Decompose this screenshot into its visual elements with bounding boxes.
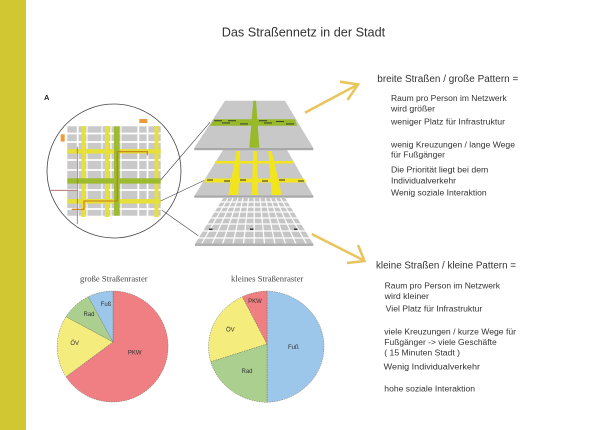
text block: small streets: viele Kreuzungen / kurze Wege für bbox=[384, 327, 516, 336]
pie chart title: large grid: große Straßenraster bbox=[80, 274, 148, 284]
text block: wide streets: weniger Platz für Infrastruktur bbox=[390, 117, 505, 126]
text block: small streets: Fußgänger -> viele Geschäfte bbox=[384, 338, 497, 347]
text block: small streets bbox=[376, 260, 516, 393]
arrow: to small streets bbox=[312, 234, 364, 263]
pie chart: large grid: Fuß bbox=[101, 302, 112, 308]
title: Das Straßennetz in der Stadt bbox=[222, 24, 386, 40]
pie chart: large grid: PKW bbox=[128, 350, 142, 356]
label A: A bbox=[44, 93, 50, 102]
text block: wide streets: Individualverkehr bbox=[391, 176, 456, 185]
text block: wide streets: Die Priorität liegt bei dem bbox=[391, 166, 489, 175]
text block: wide streets: Wenig soziale Interaktion bbox=[391, 189, 487, 198]
pie chart: small grid bbox=[209, 291, 324, 402]
text block: small streets: wird kleiner bbox=[384, 292, 429, 301]
left accent bar bbox=[0, 0, 26, 430]
pie chart: large grid: Rad bbox=[83, 312, 95, 318]
top layer: green streets bbox=[194, 101, 313, 150]
text block: small streets: hohe soziale Interaktion bbox=[384, 384, 475, 393]
text block: small streets: Wenig Individualverkehr bbox=[384, 362, 480, 371]
middle layer: yellow streets bbox=[194, 150, 313, 198]
text block: wide streets: breite Straßen / große Pattern = bbox=[377, 74, 518, 85]
arrow: to wide streets bbox=[305, 82, 358, 113]
text block: small streets: ( 15 Minuten Stadt ) bbox=[384, 349, 460, 358]
text block: wide streets: wird größer bbox=[390, 105, 435, 114]
pie chart: small grid: Rad bbox=[241, 369, 253, 375]
circular street map bbox=[47, 104, 181, 238]
pie chart: small grid: Fuß bbox=[288, 345, 299, 351]
text block: wide streets: Raum pro Person im Netzwerk bbox=[391, 94, 508, 103]
leader lines bbox=[161, 122, 210, 236]
pie chart: small grid: ÖV bbox=[226, 326, 235, 334]
text block: wide streets: wenig Kreuzungen / lange Wege bbox=[390, 141, 516, 150]
pie chart title: small grid: kleines Straßenraster bbox=[231, 274, 303, 284]
text block: small streets: Viel Platz für Infrastruktur bbox=[386, 305, 483, 314]
bottom layer: fine grid bbox=[195, 198, 313, 246]
text block: small streets: Raum pro Person im Netzwerk bbox=[385, 281, 501, 290]
text block: wide streets bbox=[377, 74, 518, 198]
text block: wide streets: für Fußgänger bbox=[391, 151, 445, 160]
pie chart: small grid: PKW bbox=[248, 299, 262, 305]
pie chart: large grid bbox=[57, 291, 168, 402]
pie chart: large grid: ÖV bbox=[70, 340, 79, 347]
text block: small streets: kleine Straßen / kleine Pattern = bbox=[376, 260, 516, 271]
